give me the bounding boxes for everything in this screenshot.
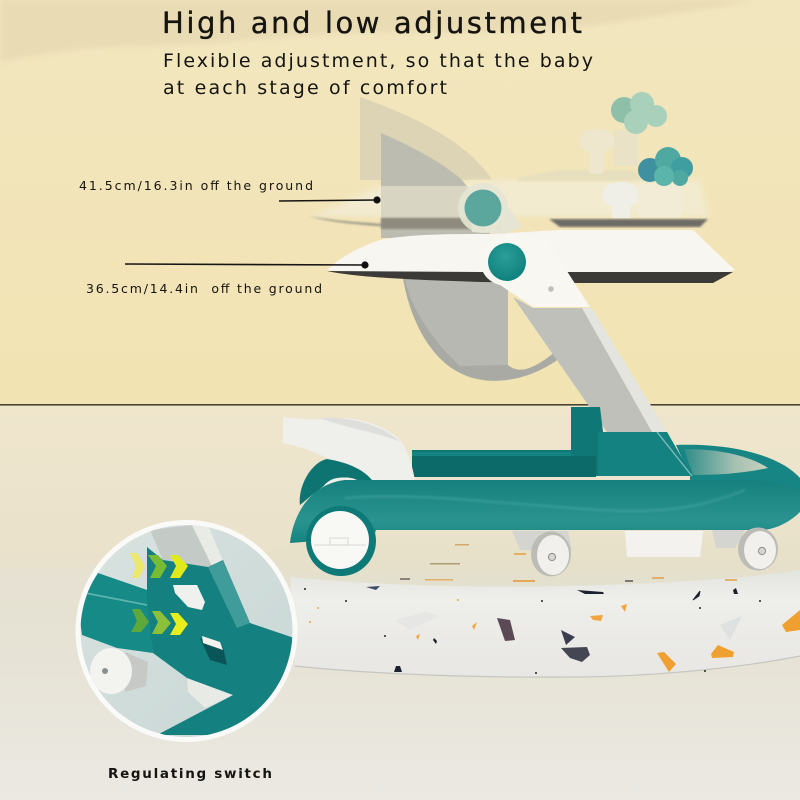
pivot bracket <box>481 234 590 307</box>
title: High and low adjustment <box>162 6 582 40</box>
subtitle: at each stage of comfort <box>163 77 447 99</box>
terrazzo chips <box>304 544 800 674</box>
height label: lowered: 36.5cm/14.4in off the ground <box>86 281 322 296</box>
upper pivot knob <box>458 183 522 234</box>
lower pivot knob <box>488 243 526 281</box>
top wave shape <box>0 0 760 62</box>
footrest white <box>283 417 415 480</box>
wheel supports and center block <box>512 530 745 557</box>
inset: regulating switch detail <box>76 520 298 742</box>
walker base <box>283 407 800 576</box>
subtitle: Flexible adjustment, so that the baby <box>163 50 593 72</box>
leader line: raised height <box>279 196 381 204</box>
white base block <box>187 678 234 708</box>
seat fabric lower <box>403 278 560 381</box>
platform side <box>290 570 800 677</box>
seat mesh <box>405 280 508 366</box>
rear wheel <box>125 652 148 692</box>
floor horizon line <box>0 404 800 406</box>
inset caption: Regulating switch <box>108 766 272 782</box>
light pillar <box>208 560 250 628</box>
column base <box>412 407 692 476</box>
main teal rail <box>290 480 800 548</box>
front wheel <box>306 506 376 576</box>
rear handle curve <box>676 445 800 528</box>
main teal body <box>147 547 300 735</box>
lower tray (lowered position) <box>327 230 735 307</box>
chevrons bottom row <box>131 609 188 635</box>
height label: raised: 41.5cm/16.3in off the ground <box>79 178 313 193</box>
white hexagon hole <box>173 585 205 610</box>
front arch <box>300 459 372 505</box>
ghost tray and seat back (raised position) <box>308 97 708 238</box>
floor <box>0 405 800 800</box>
left teal rail <box>78 573 153 653</box>
subtitle <box>163 50 593 99</box>
rear wheels <box>531 528 778 576</box>
ghost toys <box>518 92 693 218</box>
rear leg column <box>513 297 667 432</box>
leader line: lowered height <box>125 261 369 269</box>
stone platform <box>250 522 800 677</box>
grey leg <box>150 525 212 567</box>
dark slot <box>200 638 227 665</box>
chevrons top row <box>130 553 188 578</box>
platform top surface <box>250 522 800 610</box>
background wall <box>0 0 800 405</box>
